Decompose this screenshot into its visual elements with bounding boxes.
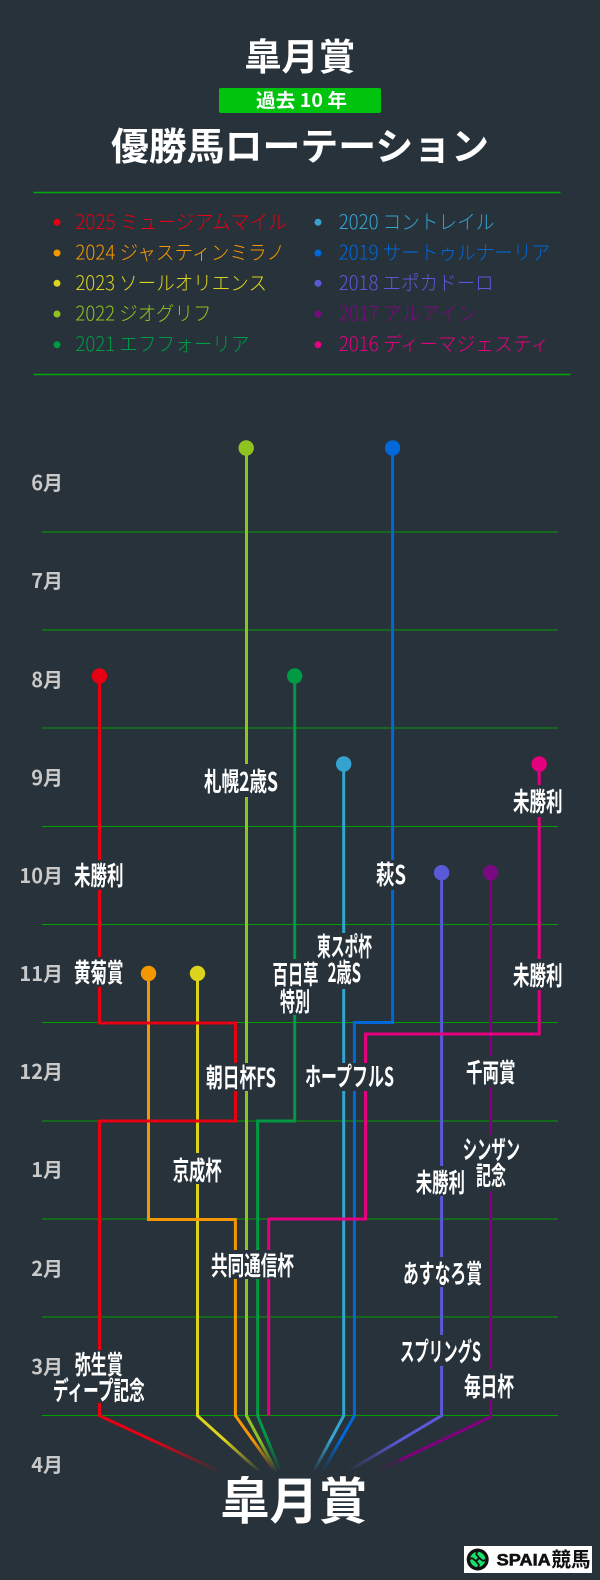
label 百日草特別: 百日草 <box>272 955 318 992</box>
month axis labels: 2月 <box>31 1253 63 1282</box>
goal label: race name: 皐月賞 <box>220 1462 368 1534</box>
label 未勝利 2018: 未勝利 <box>416 1163 465 1200</box>
label 百日草特別 <box>272 955 319 1019</box>
legend item 2017: 2017 アルアイン <box>339 298 476 327</box>
label 黄菊賞 <box>74 953 124 990</box>
label シンザン記念: シンザン <box>463 1130 520 1167</box>
label 未勝利 2016: 未勝利 <box>513 782 562 819</box>
label 未勝利 2018 <box>416 1163 465 1200</box>
route 2018 indigo <box>330 865 449 1482</box>
month axis labels: 8月 <box>31 664 63 693</box>
label 札幌2歳S <box>204 762 278 799</box>
subtitle: 優勝馬ローテーション <box>111 116 489 171</box>
legend item 2019: 2019 サートゥルナーリア <box>339 237 550 266</box>
label スプリングS <box>400 1332 481 1369</box>
legend item 2020: 2020 コントレイル <box>339 206 494 235</box>
month axis labels: 1月 <box>31 1154 63 1183</box>
label 共同通信杯 <box>211 1246 294 1283</box>
month axis labels: 9月 <box>31 762 63 791</box>
label 朝日杯FS: 朝日杯FS <box>206 1058 276 1095</box>
route 2023 yellow <box>190 966 270 1481</box>
legend item 2018: 2018 エポカドーロ <box>339 267 494 296</box>
month axis labels: 12月 <box>19 1056 63 1085</box>
label シンザン記念: 記念 <box>476 1156 506 1193</box>
logo: SPAIA <box>464 1544 592 1573</box>
label あすなろ賞 <box>403 1254 482 1291</box>
month axis labels <box>19 467 63 1478</box>
label ホープフルS <box>305 1057 394 1094</box>
route 2025 red <box>92 668 240 1481</box>
label 共同通信杯: 共同通信杯 <box>211 1246 294 1283</box>
logo: SPAIA: 競馬 <box>552 1544 590 1572</box>
label 札幌2歳S: 札幌2歳S <box>204 762 278 799</box>
route 2016 pink <box>269 756 547 1416</box>
label 千両賞 <box>466 1053 516 1090</box>
label 未勝利 2016 second <box>513 956 563 993</box>
badge: past 10 years: 過去 10 年 <box>256 86 347 113</box>
label 朝日杯FS <box>206 1058 276 1095</box>
route 2024 orange <box>141 966 282 1481</box>
legend item 2025: 2025 ミュージアムマイル <box>75 206 287 235</box>
label 東スポ杯2歳S <box>317 927 372 990</box>
label 未勝利 2016 second: 未勝利 <box>513 956 562 993</box>
label 京成杯 <box>173 1151 222 1188</box>
label 東スポ杯2歳S: 2歳S <box>328 953 361 990</box>
route 2022 lime <box>238 440 281 1480</box>
route 2019 blue <box>312 440 400 1490</box>
label 京成杯: 京成杯 <box>173 1151 222 1188</box>
label 毎日杯 <box>464 1367 514 1404</box>
label スプリングS: スプリングS <box>400 1332 481 1369</box>
label 萩S: 萩S <box>376 855 406 892</box>
month axis labels: 10月 <box>19 860 63 889</box>
label 東スポ杯2歳S: 東スポ杯 <box>317 927 372 964</box>
month axis labels: 3月 <box>31 1351 63 1380</box>
route 2017 purple <box>360 865 498 1479</box>
label 百日草特別: 特別 <box>280 982 310 1019</box>
logo: SPAIA: SPAIA <box>497 1550 551 1570</box>
legend item 2024: 2024 ジャスティンミラノ <box>75 237 285 266</box>
legend item 2021: 2021 エフフォーリア <box>75 328 250 357</box>
legend item 2022: 2022 ジオグリフ <box>75 298 212 327</box>
label 未勝利 2025: 未勝利 <box>74 856 124 893</box>
month axis labels: 7月 <box>31 565 63 594</box>
routes: rotation lines <box>92 440 547 1490</box>
month axis labels: 6月 <box>31 467 63 496</box>
legend item 2016: 2016 ディーマジェスティ <box>339 328 549 357</box>
label 弥生賞ディープ記念: ディープ記念 <box>53 1371 145 1408</box>
label あすなろ賞: あすなろ賞 <box>403 1254 482 1291</box>
label シンザン記念 <box>463 1130 520 1193</box>
race labels <box>53 762 563 1408</box>
badge: past 10 years <box>219 86 381 113</box>
label 弥生賞ディープ記念 <box>53 1345 145 1408</box>
label 未勝利 2025 <box>74 856 124 893</box>
label 毎日杯: 毎日杯 <box>464 1367 514 1404</box>
label 黄菊賞: 黄菊賞 <box>74 953 124 990</box>
route 2020 light blue <box>308 756 351 1482</box>
month axis labels: 11月 <box>19 958 63 987</box>
legend item 2023: 2023 ソールオリエンス <box>75 267 267 296</box>
month axis labels: 4月 <box>31 1449 63 1478</box>
icon: logo swirl <box>467 1548 489 1570</box>
route 2021 green <box>258 668 302 1480</box>
label 弥生賞ディープ記念: 弥生賞 <box>75 1345 123 1382</box>
label 千両賞: 千両賞 <box>466 1053 516 1090</box>
label ホープフルS: ホープフルS <box>305 1057 394 1094</box>
legend: winners by year <box>54 206 550 357</box>
title: race name: 皐月賞 <box>244 27 356 81</box>
label 未勝利 2016 <box>513 782 563 819</box>
